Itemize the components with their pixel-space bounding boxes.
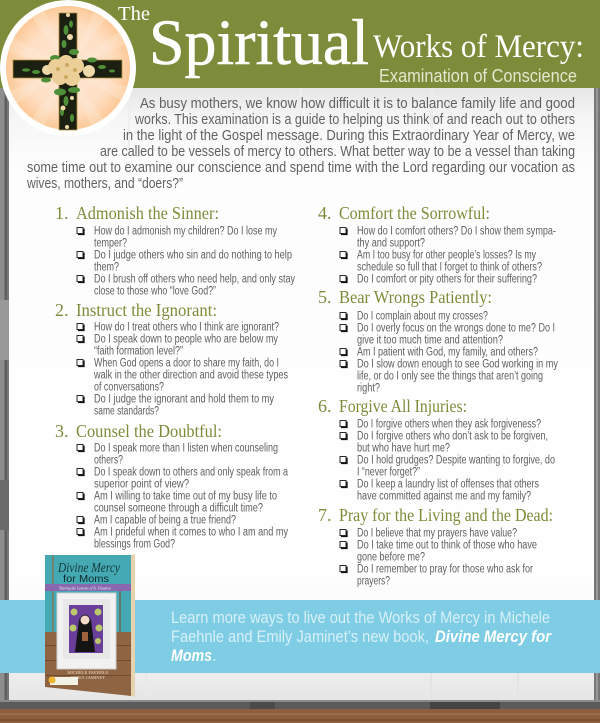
checklist 2: Do I speak down to people who are below my	[94, 334, 278, 346]
title	[118, 3, 584, 86]
checklist 6: have committed against me and my family?	[357, 490, 531, 502]
checklist 3	[77, 442, 288, 550]
section 7: Pray for the Living and the Dead	[318, 505, 553, 588]
checklist 4: Am I too busy for other people’s losses? Is my	[357, 250, 536, 262]
checklist 6: Do I keep a laundry list of offenses that others	[357, 478, 539, 490]
book cover: for Moms	[63, 574, 109, 585]
section 3: Counsel the Doubtful	[55, 421, 288, 550]
callout text: Faehnle and Emily Jaminet’s new book,	[171, 627, 429, 646]
title: The: The	[118, 3, 150, 25]
heading 6: Forgive All Injuries:	[339, 396, 467, 416]
checklist 6: Do I forgive others who don’t ask to be forgiven,	[357, 430, 548, 442]
checklist 3: Am I prideful when it comes to who I am and my	[94, 526, 288, 538]
checklist 4: thy and support?	[357, 238, 425, 250]
checklist 5: give it too much time and attention?	[357, 334, 503, 346]
checklist 6	[340, 418, 555, 502]
checklist 5	[340, 310, 558, 394]
book cover: MICHELE FAEHNLE	[67, 670, 109, 675]
checklist 3: Do I speak more than I listen when counseling	[94, 442, 278, 454]
section 6: Forgive All Injuries	[318, 396, 555, 502]
section 4: Comfort the Sorrowful	[318, 203, 556, 286]
checklist 7: Do I remember to pray for those who ask for	[357, 564, 533, 576]
heading 6: 6.	[318, 396, 332, 416]
checklist 1	[77, 226, 295, 298]
intro paragraph	[26, 96, 575, 192]
checklist 2: walk in the other direction and avoid these types	[93, 370, 288, 382]
heading 4: 4.	[318, 203, 332, 223]
callout text: Divine Mercy for	[435, 628, 552, 646]
intro paragraph: wives, mothers, and “doers?”	[26, 176, 183, 192]
book cover: Sharing the Lessons of St. Faustina	[59, 586, 111, 590]
checklist 6: Do I forgive others when they ask forgiveness?	[357, 418, 541, 430]
checklist 6: I “never forget?”	[357, 466, 420, 478]
title: Spiritual: Spiritual	[149, 7, 369, 79]
heading 7: Pray for the Living and the Dead:	[339, 505, 553, 525]
checklist 3: Do I speak down to others and only speak from a	[94, 466, 288, 478]
checklist 5: right?	[357, 382, 380, 394]
checklist 7	[340, 528, 537, 588]
callout text: Learn more ways to live out the Works of Mercy in Michele	[171, 608, 550, 627]
checklist 7: Do I take time out to think of those who have	[357, 540, 537, 552]
heading 2: Instruct the Ignorant:	[76, 300, 217, 320]
callout text	[171, 608, 552, 665]
checklist 1: Do I judge others who sin and do nothing to help	[94, 250, 292, 262]
heading 1: 1.	[55, 203, 68, 223]
checklist 2: How do I treat others who I think are ignorant?	[94, 322, 279, 334]
checklist 6: but who have hurt me?	[357, 442, 450, 454]
checklist 3: Am I willing to take time out of my busy life to	[94, 490, 277, 502]
callout text: .	[212, 646, 217, 665]
checklist 1: close to those who “love God?”	[94, 286, 216, 298]
checklist 3: blessings from God?	[94, 538, 175, 550]
icon: floral cross medallion	[0, 0, 136, 136]
checklist 3: counsel someone through a difficult time?	[94, 502, 263, 514]
book cover: EMILY JAMINET	[71, 675, 105, 680]
callout band	[0, 600, 600, 673]
checklist 2: of conversations?	[94, 382, 164, 394]
checklist 7: Do I believe that my prayers have value?	[357, 528, 517, 540]
checklist 2: When God opens a door to share my faith, do I	[94, 358, 279, 370]
book cover: Divine Mercy	[57, 561, 121, 576]
checklist 2	[77, 322, 288, 418]
checklist 4: schedule so full that I forget to think of others?	[357, 262, 542, 274]
section 1: Admonish the Sinner	[55, 203, 295, 298]
checklist 2: same standards?	[94, 406, 159, 418]
heading 3: Counsel the Doubtful:	[76, 421, 222, 441]
callout text: Moms	[171, 647, 212, 665]
checklist 7: gone before me?	[357, 552, 425, 564]
checklist 1: Do I brush off others who need help, and only stay	[94, 274, 295, 286]
checklist 1: them?	[94, 262, 119, 274]
book cover	[45, 554, 135, 697]
checklist 4	[340, 226, 556, 286]
section 2: Instruct the Ignorant	[55, 300, 288, 418]
title: Works of Mercy: Works of Mercy:	[373, 29, 584, 65]
checklist 1: temper?	[94, 238, 127, 250]
heading 2: 2.	[55, 300, 68, 320]
heading 1: Admonish the Sinner:	[76, 203, 219, 223]
heading 7: 7.	[318, 505, 332, 525]
heading 5: 5.	[318, 287, 332, 307]
checklist 5: Am I patient with God, my family, and others?	[357, 346, 538, 358]
checklist 2: “faith formation level?”	[94, 346, 183, 358]
subtitle: Examination of Conscience	[379, 65, 577, 86]
checklist 5: Do I complain about my crosses?	[357, 310, 488, 322]
checklist 4: Do I comfort or pity others for their suffering?	[357, 274, 537, 286]
heading 4: Comfort the Sorrowful:	[339, 203, 490, 223]
checklist 7: prayers?	[357, 576, 390, 588]
checklist 1: How do I admonish my children? Do I lose my	[94, 226, 277, 238]
checklist 3: others?	[94, 454, 123, 466]
section 5: Bear Wrongs Patiently	[318, 287, 558, 394]
checklist 2: Do I judge the ignorant and hold them to my	[94, 394, 274, 406]
checklist 3: Am I capable of being a true friend?	[94, 514, 236, 526]
checklist 3: superior point of view?	[94, 478, 189, 490]
heading 5: Bear Wrongs Patiently:	[339, 287, 492, 307]
header band	[0, 0, 600, 88]
checklist 5: life, or do I only see the things that aren’t going	[357, 370, 543, 382]
heading 3: 3.	[55, 421, 68, 441]
